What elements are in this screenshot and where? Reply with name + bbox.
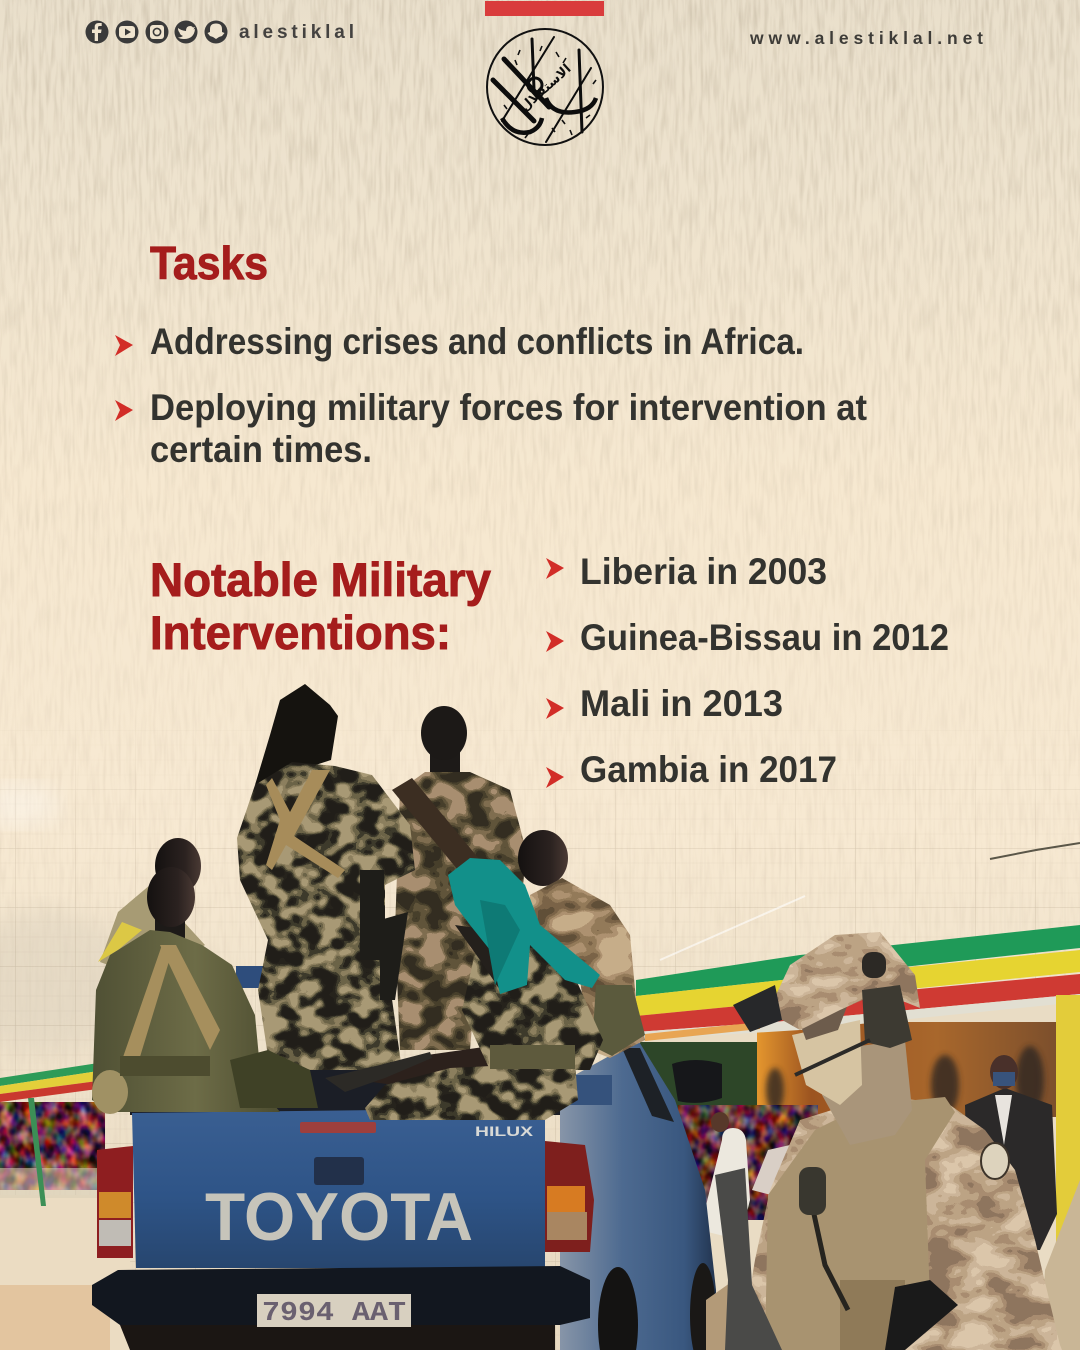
arrow bullet (115, 400, 133, 421)
rear wheel (598, 1267, 638, 1350)
truck cab and side (560, 1040, 716, 1350)
soldier: back centre with black turban (237, 684, 415, 1070)
brand text on tailgate: TOYOTA (205, 1179, 473, 1255)
icon: twitter (174, 20, 198, 44)
task 2: certain times. (150, 429, 372, 470)
icon: facebook (86, 20, 108, 44)
tactical vest (765, 1097, 955, 1350)
radio cable and unit (812, 1205, 848, 1310)
heading: notable military interventions: Interventions: (150, 606, 451, 659)
rifle on lap (325, 1052, 432, 1092)
soldier: front left in olive (92, 867, 318, 1114)
item: Mali: Mali in 2013 (580, 683, 783, 724)
soldiers on truck (92, 684, 645, 1120)
icon: snapchat (204, 20, 228, 44)
website address: www.alestiklal.net (749, 28, 983, 48)
arrow bullet (546, 631, 564, 652)
foreground soldier (706, 932, 1062, 1350)
icon: instagram (146, 20, 168, 44)
parade ground and crowd, left (0, 1062, 130, 1350)
helmet (768, 932, 920, 1030)
pickup truck: HILUX (475, 1123, 534, 1139)
logo: calligraphic seal (487, 29, 603, 145)
item: Liberia: Liberia in 2003 (580, 551, 827, 592)
red top bar (485, 1, 604, 16)
headset microphone (795, 1040, 870, 1075)
pickup truck (92, 966, 722, 1350)
soldier: far left (98, 838, 205, 980)
side mirror (672, 1060, 722, 1103)
item: Guinea-Bissau: Guinea-Bissau in 2012 (580, 617, 949, 658)
grid overlay (0, 700, 1080, 1350)
heading: notable military interventions: Notable Military (150, 553, 491, 606)
parade stand with flag stripes, right (636, 843, 1080, 1350)
night vision mount (733, 985, 782, 1032)
assault rifle (715, 1168, 782, 1350)
face mask (792, 1020, 862, 1105)
arrow bullet (546, 558, 564, 579)
left tail light (97, 1146, 133, 1258)
neck wrap (822, 1040, 912, 1145)
soldier: back right with tan uniform (518, 830, 645, 1058)
item: Gambia: Gambia in 2017 (580, 749, 837, 790)
roof seen behind soldiers (236, 966, 276, 988)
ear defender (862, 985, 912, 1048)
task 2: Deploying military forces for intervention at (150, 387, 867, 428)
arrow bullet (115, 335, 133, 356)
man in suit (965, 1055, 1057, 1250)
truck bed shadow (130, 1060, 560, 1115)
interventions list (546, 551, 949, 790)
soldier: back right (392, 706, 526, 1050)
lower left pouch (706, 1278, 760, 1350)
torso and sleeve (740, 1095, 1062, 1350)
header: social icons and handle (86, 20, 354, 44)
right tail light (545, 1141, 594, 1252)
task list (115, 321, 867, 470)
arrow bullet (546, 698, 564, 719)
soldier: turquoise turban (365, 858, 603, 1120)
task 2 (150, 387, 867, 470)
task 1: Addressing crises and conflicts in Africa. (150, 321, 804, 362)
heading: tasks: Tasks (150, 237, 268, 289)
rear bumper (92, 1266, 590, 1325)
heading: notable military interventions (150, 553, 491, 659)
tailgate (132, 1108, 545, 1268)
shoulder patch (981, 1143, 1009, 1179)
social handle: alestiklal (239, 22, 354, 43)
logo: calligraphic seal: الاستقلال (518, 62, 574, 115)
icon: youtube (116, 20, 138, 44)
licence plate: 7994 AAT (262, 1299, 406, 1329)
arrow bullet (546, 767, 564, 788)
